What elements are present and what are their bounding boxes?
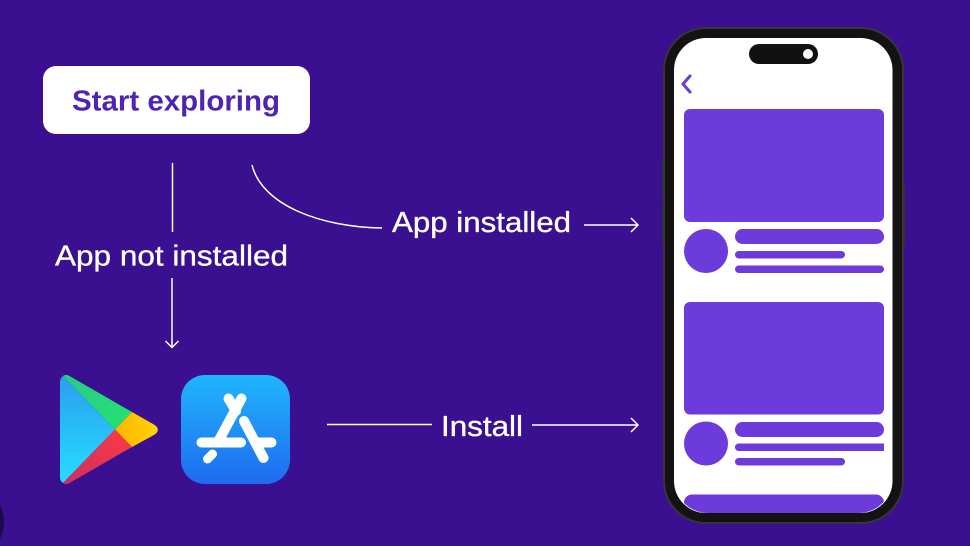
dynamic island <box>749 44 818 64</box>
icon: App Store <box>181 375 290 484</box>
button: Start exploring: Start exploring <box>72 86 280 118</box>
label: App not installed: App not installed <box>55 240 288 272</box>
card 1 <box>684 109 884 273</box>
arrow: app installed to phone <box>584 218 638 232</box>
label: App installed: App installed <box>392 207 571 239</box>
back chevron <box>683 76 690 92</box>
card 2 <box>684 302 884 466</box>
card 3 partial <box>684 494 884 513</box>
line: stores to install <box>327 424 432 426</box>
curve: start to app installed <box>252 165 382 228</box>
phone body <box>662 27 905 523</box>
arrow: app not installed to stores <box>166 278 178 348</box>
arrow: install to phone <box>532 418 638 432</box>
label: Install: Install <box>441 411 523 443</box>
button: Start exploring <box>43 66 310 134</box>
arrow: start to app not installed <box>172 163 174 232</box>
icon: Google Play <box>60 375 158 484</box>
phone mockup <box>662 27 905 534</box>
